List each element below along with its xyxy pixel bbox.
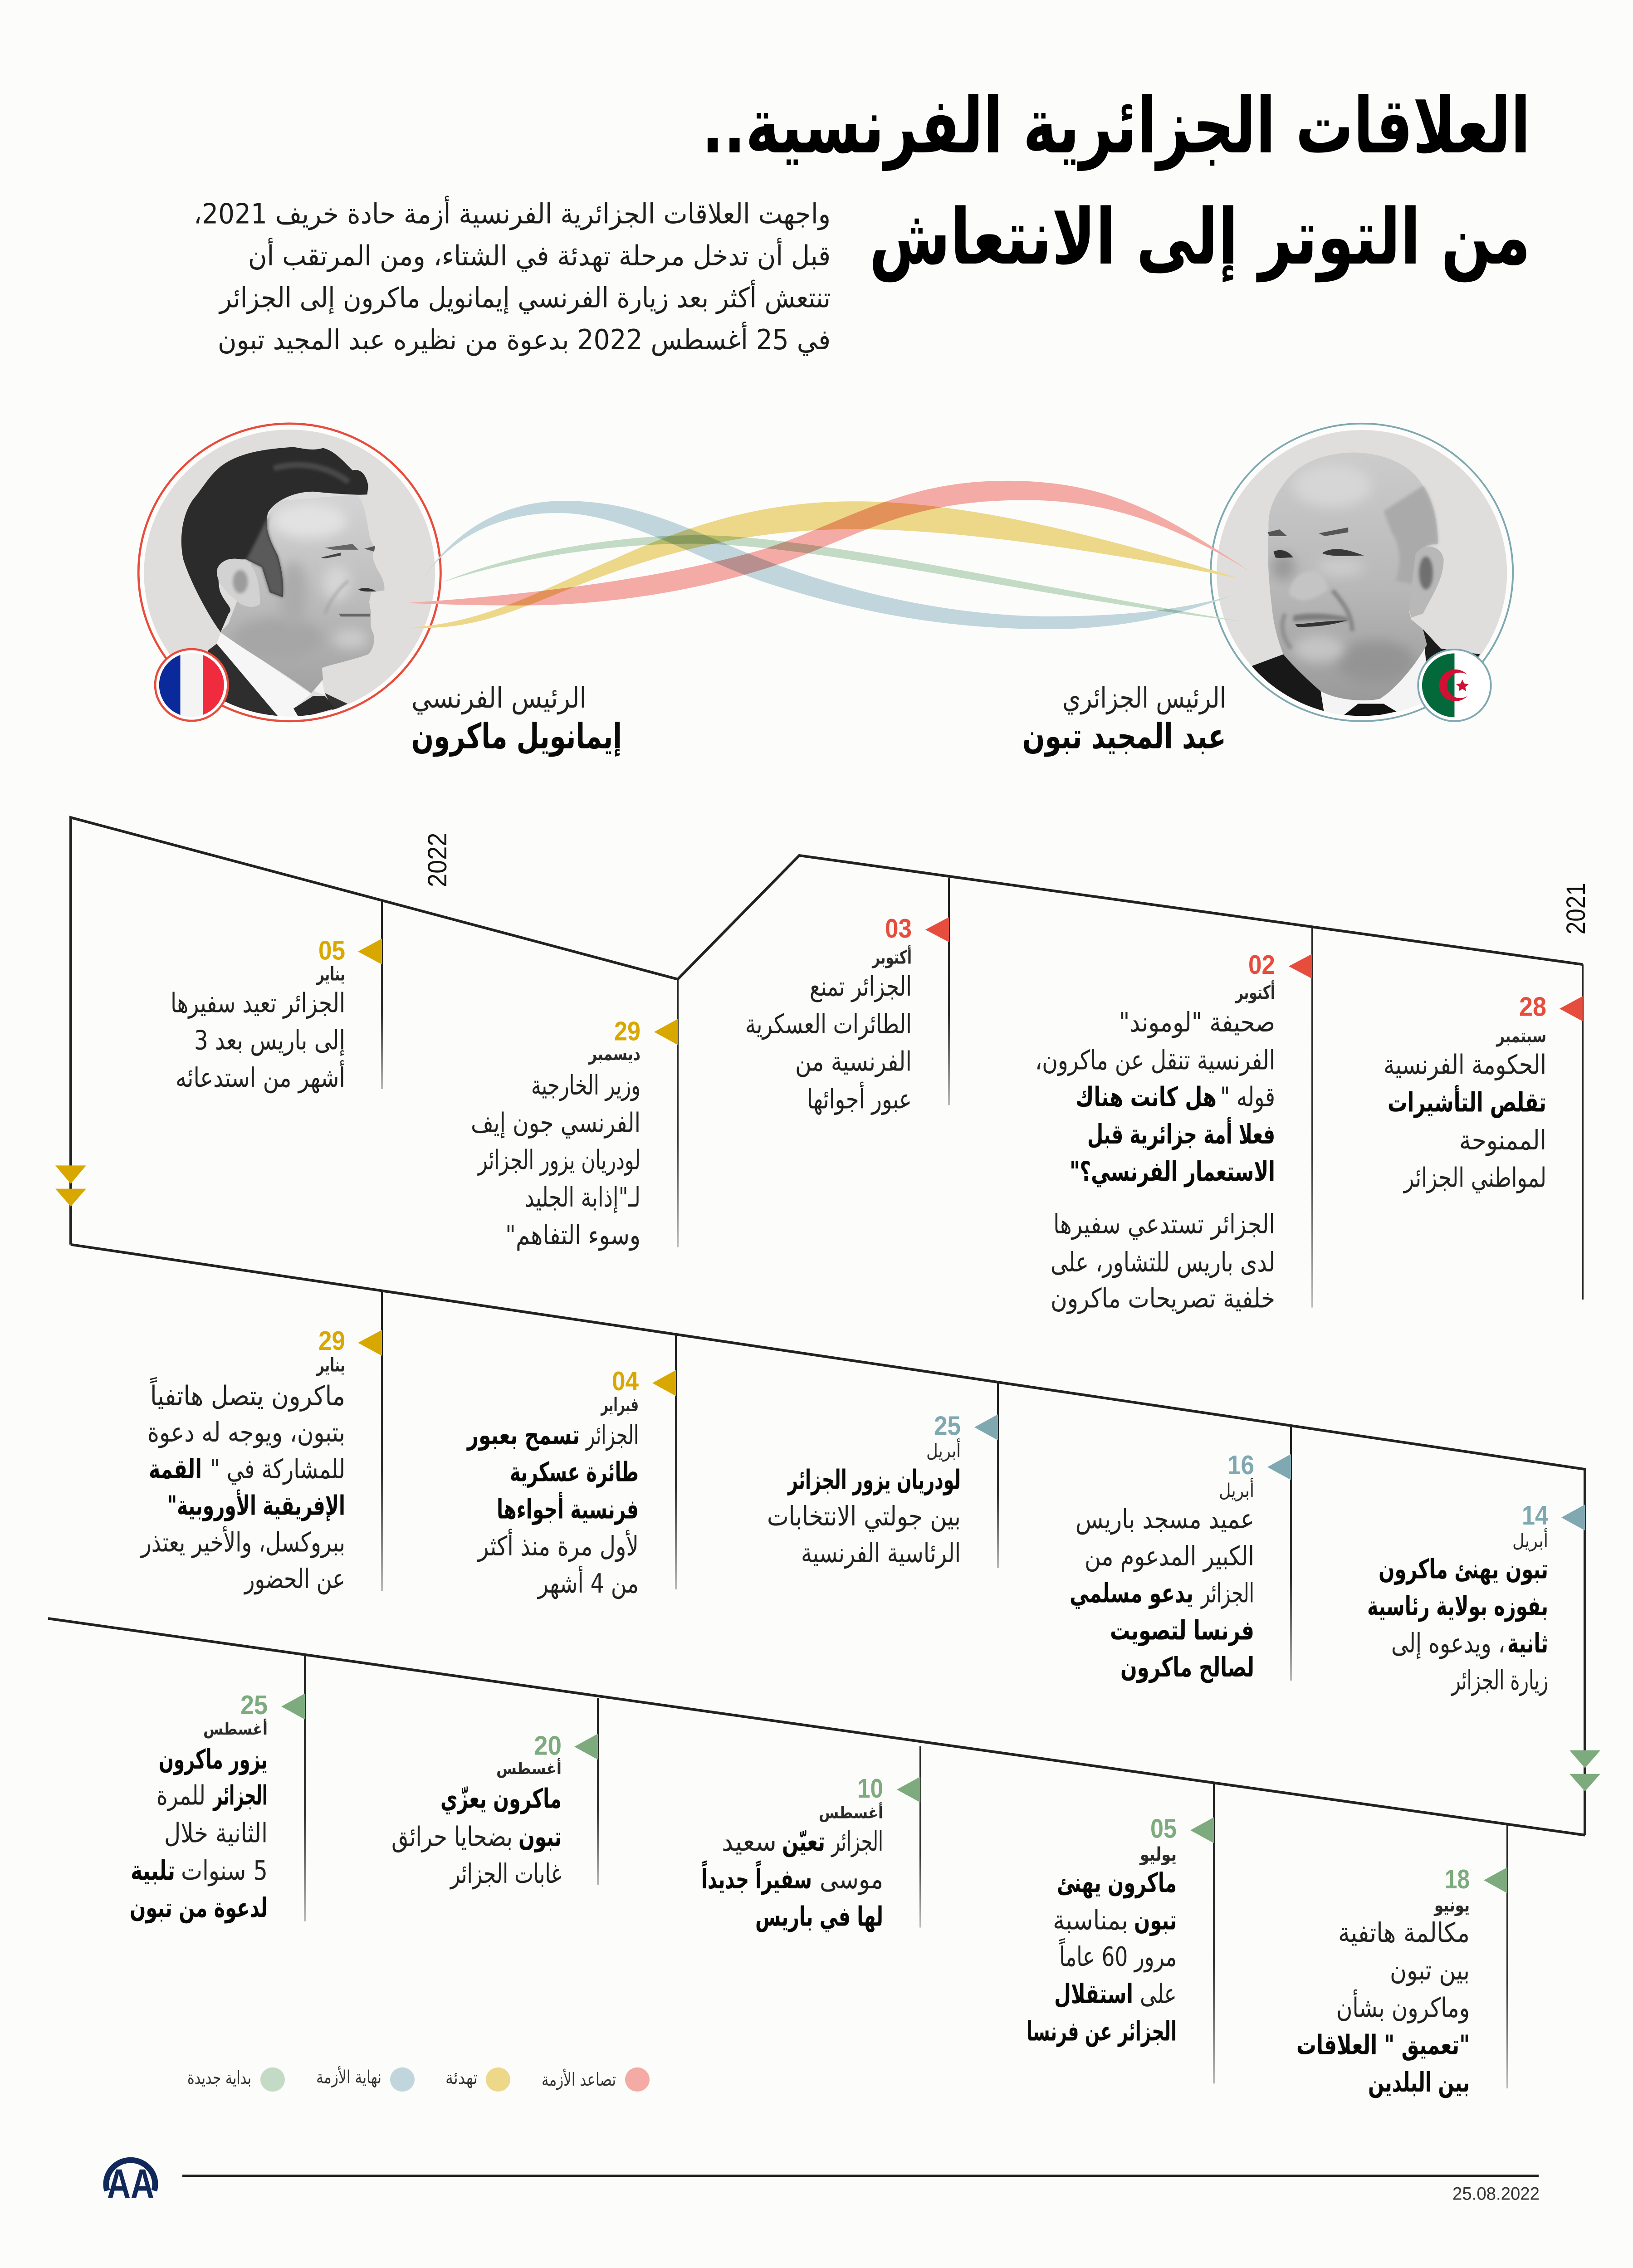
label: French president: الرئيس الفرنسي bbox=[411, 681, 587, 715]
event text: صحيفة "لوموند" bbox=[1119, 1007, 1275, 1038]
month: أبريل bbox=[1219, 1478, 1254, 1501]
event text: بين جولتي الانتخابات bbox=[767, 1501, 961, 1532]
event text: ماكرون يهنئ bbox=[1057, 1867, 1177, 1899]
event: 29 December bbox=[471, 979, 679, 1251]
event text bbox=[466, 1420, 639, 1599]
event text: طائرة عسكرية bbox=[510, 1457, 639, 1488]
label: Algerian president bbox=[1022, 681, 1226, 757]
label: French president bbox=[411, 681, 622, 757]
event text: فرنسا لتصويت bbox=[1110, 1615, 1254, 1646]
event: 20 August bbox=[391, 1698, 599, 1890]
event text: للمشاركة في " bbox=[210, 1454, 345, 1485]
event text: بين البلدين bbox=[1368, 2067, 1470, 2098]
marker bbox=[574, 1734, 598, 1760]
event text bbox=[1296, 1917, 1470, 2098]
event text: الجزائر bbox=[212, 1780, 268, 1812]
portrait: Tebboune bbox=[1211, 424, 1513, 721]
portrait: Macron bbox=[138, 424, 440, 721]
marker bbox=[358, 1330, 382, 1356]
marker bbox=[897, 1777, 920, 1803]
tick line bbox=[1290, 1426, 1292, 1681]
tick line bbox=[677, 979, 679, 1247]
month: يناير bbox=[316, 963, 345, 986]
year 2021: 2021 bbox=[1562, 883, 1591, 934]
date: 04 bbox=[612, 1366, 639, 1396]
footer date: 25.08.2022 bbox=[1452, 2184, 1540, 2204]
marker bbox=[925, 917, 949, 942]
event text bbox=[1070, 1504, 1254, 1683]
tick line bbox=[675, 1334, 677, 1589]
event text: من 4 أشهر bbox=[537, 1566, 639, 1599]
legend: new beginning: بداية جديدة bbox=[187, 2068, 251, 2088]
event text: تقلص التأشيرات bbox=[1388, 1085, 1546, 1118]
legend: calm bbox=[445, 2068, 510, 2092]
tick line bbox=[381, 1291, 383, 1591]
event text: الكبير المدعوم من bbox=[1085, 1541, 1254, 1572]
month: سبتمبر bbox=[1496, 1025, 1546, 1047]
event text: أشهر من استدعائه bbox=[176, 1061, 345, 1094]
tick line bbox=[919, 1746, 921, 1928]
date: 18 bbox=[1445, 1864, 1470, 1894]
date: 29 bbox=[614, 1016, 640, 1046]
legend bbox=[187, 2066, 650, 2092]
month: فبراير bbox=[601, 1393, 639, 1416]
event text: فعلا أمة جزائرية قبل bbox=[1087, 1117, 1275, 1150]
event text: عن الحضور bbox=[244, 1564, 345, 1595]
event text: ، ويدعوه إلى bbox=[1391, 1628, 1505, 1659]
event text: وزير الخارجية bbox=[531, 1070, 640, 1101]
tick line bbox=[597, 1698, 599, 1885]
footer rule bbox=[182, 2175, 1539, 2177]
event text: لأول مرة منذ أكثر bbox=[477, 1529, 639, 1562]
event: 28 September bbox=[1384, 992, 1583, 1194]
icon: French flag bbox=[155, 649, 228, 721]
marker bbox=[358, 938, 382, 964]
event text bbox=[1367, 1554, 1548, 1696]
event text: تلبية bbox=[131, 1856, 175, 1887]
event text: يزور ماكرون bbox=[159, 1744, 268, 1775]
event text: لودريان يزور الجزائر bbox=[787, 1465, 961, 1496]
month: أغسطس bbox=[496, 1758, 562, 1778]
event text: ماكرون يعزّي bbox=[440, 1784, 562, 1815]
ribbon: calm (yellow) bbox=[408, 501, 1241, 628]
tick line bbox=[1311, 927, 1313, 1308]
month: ديسمبر bbox=[588, 1042, 640, 1065]
marker bbox=[652, 1370, 676, 1396]
marker bbox=[1560, 996, 1583, 1021]
intro paragraph: قبل أن تدخل مرحلة تهدئة في الشتاء، ومن المرتقب أن bbox=[248, 238, 831, 272]
event text: عميد مسجد باريس bbox=[1076, 1504, 1254, 1535]
event text: الجزائر تمنع bbox=[810, 972, 912, 1002]
event text: "تعميق " العلاقات bbox=[1296, 2030, 1470, 2061]
month: يوليو bbox=[1139, 1843, 1177, 1866]
event text: فرنسية أجواءها bbox=[497, 1492, 639, 1525]
event text bbox=[171, 988, 345, 1094]
event: 14 April bbox=[1367, 1501, 1585, 1696]
event: 25 August bbox=[130, 1655, 306, 1924]
label: Algerian president: الرئيس الجزائري bbox=[1062, 681, 1226, 715]
legend: end of crisis bbox=[316, 2066, 415, 2092]
arrows: green down, right bbox=[1569, 1750, 1600, 1791]
intro paragraph: واجهت العلاقات الجزائرية الفرنسية أزمة حادة خريف 2021، bbox=[194, 196, 831, 230]
event text: للمرة bbox=[156, 1780, 205, 1812]
event: 10 August bbox=[701, 1746, 921, 1933]
date: 25 bbox=[934, 1411, 961, 1441]
event text: وماكرون بشأن bbox=[1336, 1989, 1470, 2024]
tick line bbox=[1213, 1783, 1215, 2083]
event text: تبون bbox=[518, 1822, 562, 1853]
event text: القمة bbox=[149, 1454, 202, 1485]
event text: لدعوة من تبون bbox=[130, 1892, 268, 1924]
tick line bbox=[997, 1383, 999, 1568]
date: 16 bbox=[1227, 1450, 1254, 1480]
event: 05 July bbox=[1027, 1783, 1215, 2083]
event text: لمواطني الجزائر bbox=[1403, 1163, 1546, 1194]
ribbon: escalation (red) bbox=[405, 481, 1250, 606]
event text: لصالح ماكرون bbox=[1120, 1652, 1254, 1683]
event: 03 October bbox=[745, 878, 950, 1115]
event text: الفرنسية تنقل عن ماكرون، bbox=[1035, 1045, 1275, 1076]
event text: وسوء التفاهم" bbox=[505, 1220, 640, 1251]
event text: الفرنسي جون إيف bbox=[471, 1108, 640, 1139]
date: 20 bbox=[534, 1730, 562, 1760]
event text bbox=[745, 972, 912, 1115]
event text: سفيراً جديداً bbox=[701, 1860, 812, 1895]
event text: بمناسبة bbox=[1053, 1905, 1128, 1936]
event text: إلى باريس بعد 3 bbox=[194, 1025, 345, 1056]
event text: الفرنسية من bbox=[795, 1046, 912, 1078]
event text: سعيد bbox=[722, 1827, 777, 1857]
event text bbox=[130, 1744, 268, 1924]
event text bbox=[1384, 1050, 1546, 1194]
event text: لـ"إذابة الجليد bbox=[525, 1182, 640, 1213]
event text: غابات الجزائر bbox=[450, 1858, 562, 1890]
timeline frame: row 1 bbox=[71, 817, 1583, 1245]
event text: ماكرون يتصل هاتفياً bbox=[150, 1377, 345, 1412]
event text: الجزائر bbox=[585, 1420, 639, 1451]
legend: escalation: تصاعد الأزمة bbox=[542, 2068, 616, 2090]
event text: تبون bbox=[1134, 1905, 1177, 1936]
month: أكتوبر bbox=[872, 945, 912, 968]
event text: الجزائر تستدعي سفيرها bbox=[1053, 1209, 1275, 1240]
marker bbox=[1484, 1867, 1507, 1893]
event text: زيارة الجزائر bbox=[1451, 1665, 1548, 1696]
tick line bbox=[381, 900, 383, 1089]
event text: استقلال bbox=[1054, 1979, 1133, 2010]
title bbox=[702, 82, 1530, 283]
marker bbox=[1267, 1454, 1291, 1480]
event text: الحكومة الفرنسية bbox=[1384, 1050, 1546, 1080]
timeline right edge: row 1 bbox=[1582, 964, 1584, 1300]
intro paragraph: تنتعش أكثر بعد زيارة الفرنسي إيمانويل ماكرون إلى الجزائر bbox=[218, 280, 831, 314]
marker bbox=[974, 1414, 998, 1440]
date: 10 bbox=[857, 1773, 883, 1804]
marker bbox=[1561, 1505, 1585, 1530]
event text: ثانية bbox=[1507, 1628, 1548, 1659]
marker bbox=[654, 1019, 678, 1045]
event text bbox=[1027, 1867, 1177, 2048]
month: أبريل bbox=[926, 1438, 961, 1461]
date: 29 bbox=[318, 1326, 345, 1356]
timeline frame: row 2 bbox=[71, 1245, 1585, 1835]
event text: الطائرات العسكرية bbox=[745, 1009, 912, 1040]
marker bbox=[281, 1694, 305, 1720]
event text: هل كانت هناك bbox=[1076, 1082, 1217, 1113]
event text: عبور أجوائها bbox=[807, 1082, 912, 1115]
event: 04 February bbox=[466, 1334, 677, 1599]
event text bbox=[701, 1827, 883, 1933]
event text: الاستعمار الفرنسي؟" bbox=[1070, 1156, 1275, 1188]
date: 25 bbox=[240, 1690, 268, 1720]
event text: لدى باريس للتشاور، على bbox=[1051, 1247, 1275, 1278]
event: 05 January bbox=[171, 900, 383, 1094]
event: 29 January bbox=[140, 1291, 383, 1595]
event text: الثانية خلال bbox=[164, 1818, 268, 1849]
month: أكتوبر bbox=[1235, 980, 1275, 1004]
year 2022: 2022 bbox=[423, 833, 452, 887]
event text bbox=[140, 1377, 345, 1595]
month: يناير bbox=[316, 1354, 345, 1376]
intro paragraph: في 25 أغسطس 2022 بدعوة من نظيره عبد المجيد تبون bbox=[218, 322, 831, 356]
event text bbox=[767, 1465, 961, 1569]
legend: end of crisis: نهاية الأزمة bbox=[316, 2066, 381, 2087]
event text: بضحايا حرائق bbox=[391, 1822, 513, 1853]
intro paragraph bbox=[194, 196, 831, 356]
tick line bbox=[1506, 1825, 1508, 2088]
event text: تبون يهنئ ماكرون bbox=[1379, 1554, 1548, 1585]
ribbon: new beginning (green) bbox=[442, 535, 1245, 622]
month: أبريل bbox=[1512, 1528, 1548, 1551]
event text: ببروكسل، والأخير يعتذر bbox=[140, 1526, 345, 1558]
event: 25 April bbox=[767, 1383, 999, 1569]
event text: مكالمة هاتفية bbox=[1338, 1917, 1470, 1949]
event text: الجزائر bbox=[831, 1827, 883, 1857]
event text: يدعو مسلمي bbox=[1070, 1578, 1193, 1609]
event text: على bbox=[1140, 1979, 1177, 2010]
marker bbox=[1289, 954, 1312, 979]
event text: تعيّن bbox=[782, 1827, 825, 1857]
date: 05 bbox=[1150, 1813, 1177, 1844]
event text: قوله " bbox=[1220, 1082, 1275, 1113]
ribbon: end of crisis (teal) bbox=[419, 501, 1232, 629]
tick line bbox=[948, 878, 950, 1105]
ribbons between the presidents bbox=[405, 481, 1250, 629]
label: French president: إيمانويل ماكرون bbox=[411, 716, 622, 757]
legend: calm: تهدئة bbox=[445, 2068, 478, 2088]
event text bbox=[471, 1070, 640, 1251]
date: 02 bbox=[1248, 949, 1275, 980]
event text: موسى bbox=[820, 1864, 883, 1895]
logo: AA: AA bbox=[107, 2161, 154, 2207]
event text: الجزائر تعيد سفيرها bbox=[171, 988, 345, 1019]
event text: بتبون، ويوجه له دعوة bbox=[147, 1417, 345, 1448]
event text: الممنوحة bbox=[1459, 1125, 1546, 1156]
event: 18 June bbox=[1296, 1825, 1508, 2098]
icon: Algerian flag bbox=[1418, 650, 1491, 721]
date: 03 bbox=[885, 914, 912, 943]
event text: 5 سنوات bbox=[181, 1856, 268, 1887]
event: 02 October bbox=[1035, 927, 1313, 1314]
event text: تسمح بعبور bbox=[466, 1420, 580, 1451]
arrows: yellow down, left bbox=[55, 1165, 86, 1207]
event text: لودريان يزور الجزائر bbox=[477, 1145, 640, 1176]
event text: الجزائر bbox=[1200, 1578, 1254, 1609]
event text bbox=[391, 1784, 562, 1890]
event: 16 April bbox=[1070, 1426, 1292, 1683]
event text: مرور 60 عاماً bbox=[1059, 1938, 1177, 1973]
date: 28 bbox=[1519, 992, 1546, 1022]
event text: لها في باريس bbox=[755, 1901, 883, 1933]
marker bbox=[1190, 1817, 1214, 1843]
event text: الرئاسية الفرنسية bbox=[801, 1538, 961, 1569]
event text: خلفية تصريحات ماكرون bbox=[1051, 1283, 1275, 1314]
month: أغسطس bbox=[203, 1718, 268, 1739]
label: Algerian president: عبد المجيد تبون bbox=[1022, 716, 1226, 757]
tick line bbox=[304, 1655, 306, 1921]
event text: الجزائر عن فرنسا bbox=[1027, 2016, 1177, 2048]
month: يونيو bbox=[1433, 1894, 1470, 1916]
event text: الإفريقية الأوروبية" bbox=[167, 1490, 345, 1521]
timeline frame: row 3 bbox=[48, 1618, 1585, 1835]
month: أغسطس bbox=[819, 1802, 883, 1822]
date: 05 bbox=[318, 935, 345, 965]
date: 14 bbox=[1522, 1501, 1548, 1530]
event text bbox=[1035, 1007, 1275, 1314]
event text: بين تبون bbox=[1390, 1955, 1470, 1986]
event text: بفوزه بولاية رئاسية bbox=[1367, 1591, 1548, 1622]
